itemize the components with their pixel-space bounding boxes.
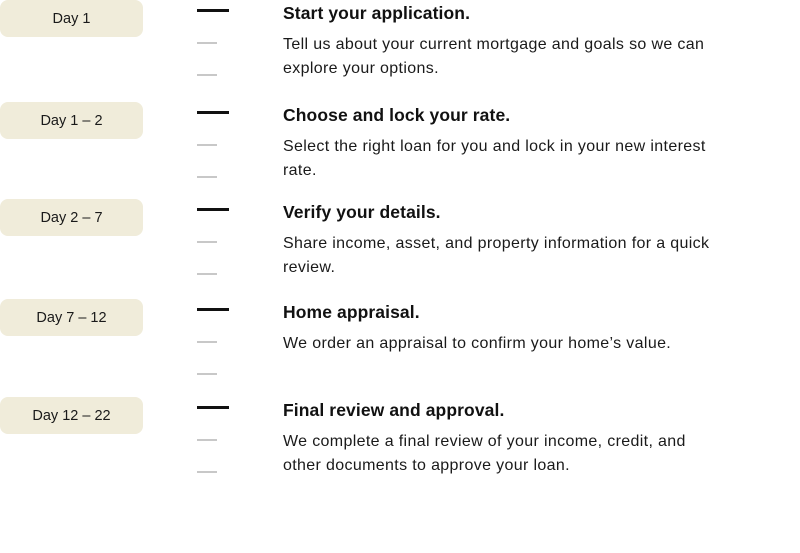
title: Choose and lock your rate. — [283, 105, 510, 125]
description — [283, 235, 709, 276]
step 3 — [0, 199, 709, 276]
title: Home appraisal. — [283, 302, 420, 322]
description: We complete a final review of your income, credit, and — [283, 433, 686, 450]
pill: Day 7-12: Day 7 – 12 — [36, 310, 107, 326]
pill: Day 1-2 — [0, 102, 143, 139]
tick — [197, 406, 229, 409]
pill: Day 7-12 — [0, 299, 143, 336]
description: Tell us about your current mortgage and goals so we can — [283, 36, 704, 53]
description: review. — [283, 259, 335, 276]
title: Start your application. — [283, 3, 470, 23]
step 2 — [0, 102, 706, 179]
description — [283, 36, 704, 77]
title: Final review and approval. — [283, 400, 504, 420]
pill: Day 2-7: Day 2 – 7 — [40, 210, 103, 226]
pill: Day 1-2: Day 1 – 2 — [40, 113, 103, 129]
pill: Day 12-22: Day 12 – 22 — [32, 408, 111, 424]
step 4 — [0, 299, 671, 375]
pill: Day 2-7 — [0, 199, 143, 236]
description: Share income, asset, and property information for a quick — [283, 235, 709, 252]
tick — [197, 308, 229, 311]
description: We order an appraisal to confirm your home’s value. — [283, 335, 671, 352]
pill: Day 1 — [0, 0, 143, 37]
description: rate. — [283, 162, 317, 179]
description — [283, 433, 686, 474]
description: other documents to approve your loan. — [283, 457, 570, 474]
pill: Day 1: Day 1 — [53, 11, 90, 27]
description: Select the right loan for you and lock in your new interest — [283, 138, 706, 155]
tick — [197, 208, 229, 211]
step 5 — [0, 397, 686, 474]
step 1 — [0, 0, 704, 77]
title: Verify your details. — [283, 202, 441, 222]
tick — [197, 9, 229, 12]
description: explore your options. — [283, 60, 439, 77]
pill: Day 12-22 — [0, 397, 143, 434]
description — [283, 138, 706, 179]
tick — [197, 111, 229, 114]
